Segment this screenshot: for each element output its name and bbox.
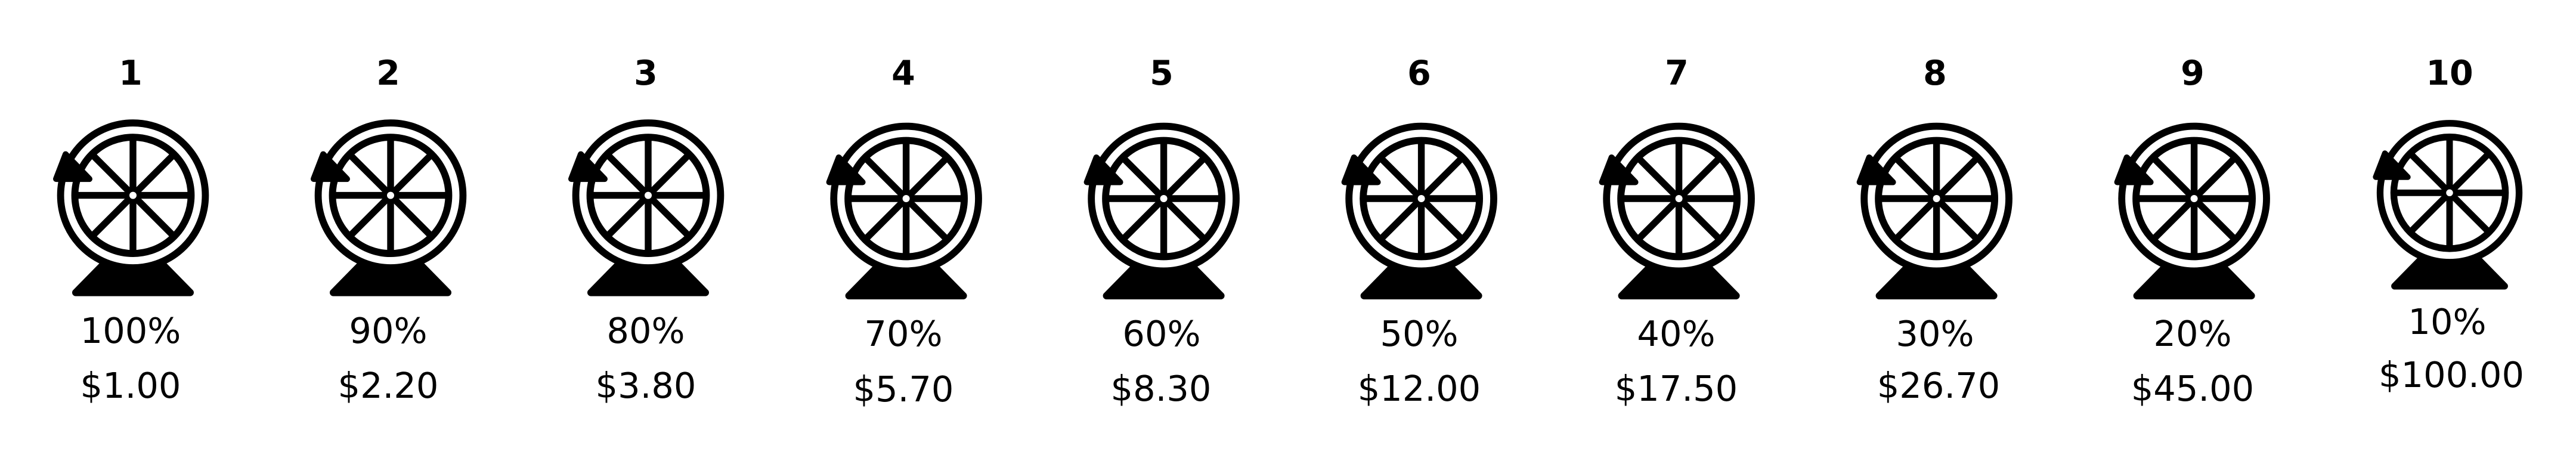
column 10	[2376, 54, 2524, 395]
percentage 50%: 50%	[1380, 313, 1459, 354]
column 3	[571, 54, 720, 406]
column 5	[1087, 54, 1236, 409]
column 2	[314, 54, 463, 406]
number 8: 8	[1923, 54, 1947, 93]
price $1.00: $1.00	[80, 365, 181, 406]
price $100.00: $100.00	[2379, 354, 2524, 395]
column 4	[829, 54, 979, 410]
price $12.00: $12.00	[1358, 368, 1481, 409]
icon: prize wheel 10	[2376, 123, 2519, 286]
price $2.20: $2.20	[338, 365, 438, 406]
number 10: 10	[2426, 54, 2473, 93]
percentage 40%: 40%	[1637, 313, 1716, 354]
icon: prize wheel 8	[1860, 126, 2009, 296]
number 7: 7	[1665, 54, 1689, 93]
icon: prize wheel 4	[829, 126, 979, 296]
number 1: 1	[119, 54, 143, 93]
icon: prize wheel 2	[314, 123, 463, 293]
icon: prize wheel 5	[1087, 126, 1236, 296]
icon: prize wheel 3	[571, 123, 720, 293]
price $17.50: $17.50	[1615, 368, 1738, 409]
price $8.30: $8.30	[1111, 368, 1211, 409]
number 4: 4	[891, 54, 915, 93]
percentage 100%: 100%	[80, 310, 181, 351]
price $3.80: $3.80	[596, 365, 696, 406]
price $26.70: $26.70	[1877, 365, 2000, 406]
number 2: 2	[376, 54, 400, 93]
column 8	[1860, 54, 2009, 406]
price $5.70: $5.70	[853, 369, 953, 410]
column 9	[2117, 54, 2267, 409]
price $45.00: $45.00	[2131, 368, 2254, 409]
percentage 80%: 80%	[606, 310, 685, 351]
number 3: 3	[634, 54, 658, 93]
number 9: 9	[2181, 54, 2205, 93]
percentage 60%: 60%	[1122, 313, 1201, 354]
number 6: 6	[1407, 54, 1431, 93]
icon: prize wheel 6	[1345, 126, 1494, 296]
icon: prize wheel 1	[56, 123, 205, 293]
number 5: 5	[1150, 54, 1174, 93]
icon: prize wheel 7	[1602, 126, 1751, 296]
percentage 90%: 90%	[349, 310, 428, 351]
column 7	[1602, 54, 1751, 409]
percentage 10%: 10%	[2408, 301, 2487, 342]
percentage 70%: 70%	[864, 313, 943, 354]
column 1	[56, 54, 205, 406]
percentage 30%: 30%	[1896, 313, 1974, 354]
percentage 20%: 20%	[2153, 313, 2232, 354]
icon: prize wheel 9	[2117, 126, 2267, 296]
column 6	[1345, 54, 1494, 409]
